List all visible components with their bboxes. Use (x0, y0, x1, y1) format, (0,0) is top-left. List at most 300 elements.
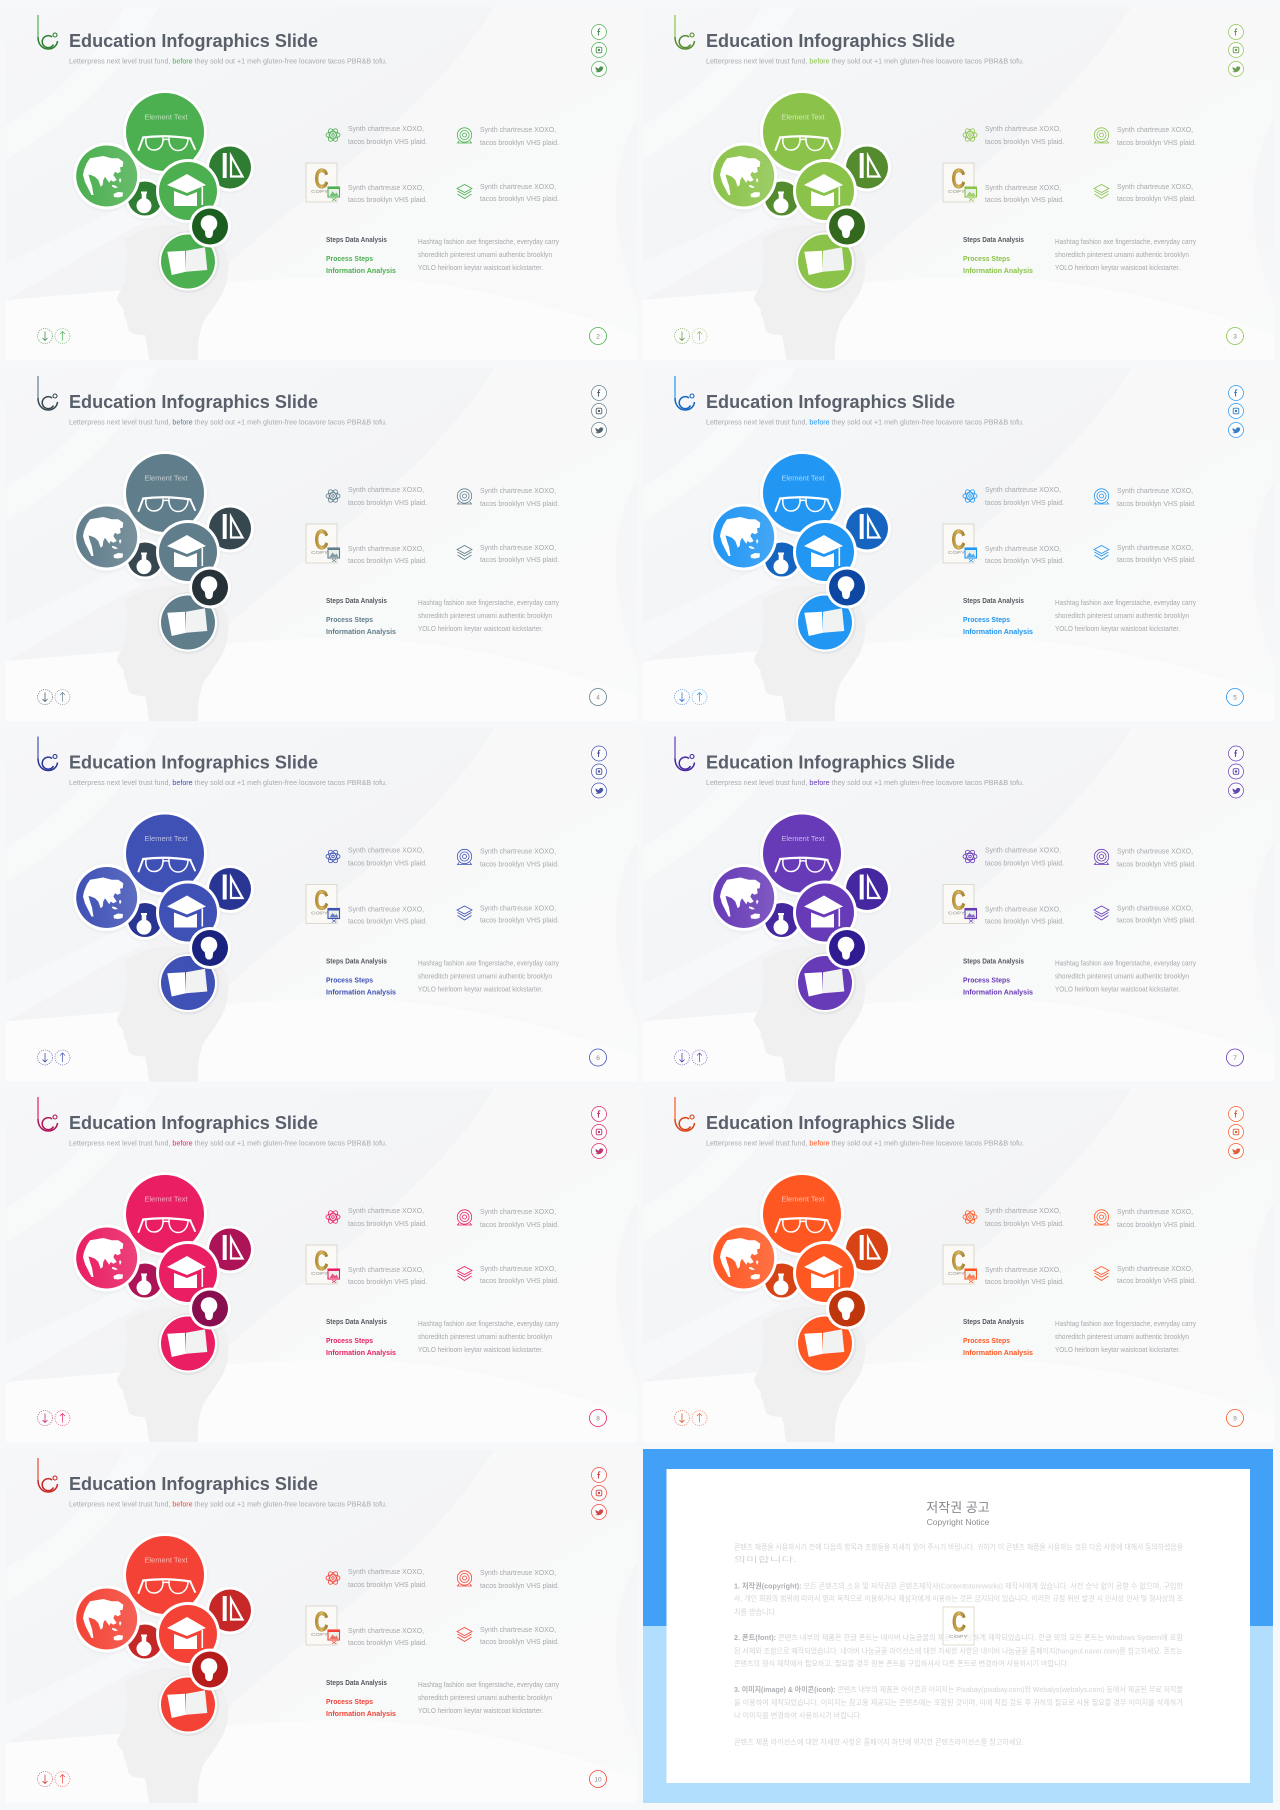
text: item 2: tacos brooklyn VHS plaid. (1117, 1220, 1196, 1229)
circle: glasses with label (760, 90, 844, 174)
circle: glasses with label: Element Text (144, 474, 189, 482)
text: item 4: tacos brooklyn VHS plaid. (480, 555, 559, 564)
navigation arrows (674, 1410, 707, 1426)
text: item 1 (348, 1567, 427, 1589)
text: item 4 (480, 904, 559, 924)
heading: steps data analysis: Steps Data Analysis (326, 1678, 387, 1687)
circle: triangle ruler (206, 1586, 254, 1634)
circle: light bulb (189, 206, 231, 248)
text: item 1: Synth chartreuse XOXO, (348, 846, 424, 854)
notice subtitle: Copyright Notice (927, 1517, 990, 1527)
title: Education Infographics Slide (69, 392, 318, 412)
page number (590, 328, 606, 344)
text: item 1: tacos brooklyn VHS plaid. (348, 1580, 427, 1589)
text: item 1 (348, 846, 427, 868)
paragraph: YOLO heirloom keytar waistcoat kickstarter. (418, 263, 543, 272)
navigation arrows (674, 1050, 707, 1065)
text: item 3: Synth chartreuse XOXO, (348, 904, 424, 914)
icon: layers (1094, 546, 1109, 560)
colored labels: Information Analysis (326, 627, 396, 636)
text: item 3: Synth chartreuse XOXO, (985, 183, 1061, 192)
circle: light bulb (189, 1648, 231, 1690)
copyright stamp: C (314, 163, 328, 194)
icon: atom (963, 488, 977, 504)
logo (675, 1097, 694, 1131)
text: item 3: tacos brooklyn VHS plaid. (985, 1277, 1064, 1286)
text: item 3: tacos brooklyn VHS plaid. (348, 1277, 427, 1286)
text: item 1: Synth chartreuse XOXO, (348, 485, 424, 494)
colored labels (963, 254, 1033, 275)
circle: book (158, 231, 220, 293)
text: item 1: tacos brooklyn VHS plaid. (985, 858, 1064, 868)
circle: graduation cap (156, 159, 220, 223)
circle: triangle ruler (206, 865, 254, 913)
text: item 3 (348, 904, 427, 926)
text: item 3: Synth chartreuse XOXO, (985, 1265, 1061, 1274)
white sheet (666, 1469, 1250, 1783)
logo (38, 15, 58, 49)
copyright stamp: COPY (311, 910, 328, 916)
text: item 2 (480, 125, 559, 147)
text: item 1: Synth chartreuse XOXO, (985, 124, 1061, 133)
text: item 3: tacos brooklyn VHS plaid. (348, 195, 427, 204)
circle: glasses with label (123, 90, 207, 174)
head silhouette (117, 1668, 229, 1803)
panel background (643, 368, 1274, 721)
circle: graduation cap (156, 1602, 220, 1666)
text: item 1: tacos brooklyn VHS plaid. (985, 137, 1064, 146)
subtitle: Letterpress next level trust fund, before they sold out +1 meh gluten-free locavore tacos PBR&B tofu. (69, 418, 387, 426)
paragraph (1055, 598, 1196, 633)
intro text: 콘텐츠 제품을 사용하시기 전에 다음의 항목과 조항들을 자세히 읽어 주시기 바랍니다. 귀하가 이 콘텐츠 제품을 사용하는 것은 다음 사항에 대해서 동의하셨음을 (734, 1542, 1183, 1552)
circle: flask (762, 900, 802, 940)
circle: book (794, 231, 856, 293)
paragraph (1055, 237, 1196, 272)
copyright stamp (943, 884, 976, 924)
section 2 text: 콘텐츠의 형식 제작에서 필요하고, 필요할 경우 원본 폰트를 구입하셔서 다른 폰트로 변경하여 사용하시기 바랍니다. (734, 1659, 1069, 1668)
text: item 4: Synth chartreuse XOXO, (480, 1264, 556, 1273)
paragraph: Hashtag fashion axe fingerstache, everyday carry (418, 1680, 559, 1689)
circle: globe (73, 1224, 140, 1292)
text: item 2: tacos brooklyn VHS plaid. (1117, 499, 1196, 508)
section 1 text: 사, 개인 회원의 범위에 따라서 영리 목적으로 이용하거나 제삼자에게 이용하는 것은 금지되어 있습니다. 이러한 규정 위반 발견 시 민사상 민사 및 형사상의 조 (734, 1594, 1183, 1603)
text: item 2: tacos brooklyn VHS plaid. (1117, 138, 1196, 147)
paragraph: shoreditch pinterest umami authentic brooklyn (418, 611, 552, 620)
heading: steps data analysis: Steps Data Analysis (963, 1317, 1024, 1326)
logo (675, 15, 694, 49)
paragraph (418, 237, 559, 272)
slide 1: green (6, 7, 637, 360)
colored labels: Information Analysis (963, 988, 1033, 996)
text: item 2 (480, 486, 559, 508)
heading: steps data analysis: Steps Data Analysis (326, 956, 387, 966)
text: item 4 (1117, 904, 1196, 924)
slide 9: red (6, 1450, 637, 1803)
text: item 4 (480, 543, 559, 564)
text: item 3: Synth chartreuse XOXO, (985, 904, 1061, 914)
navigation arrows (38, 690, 70, 704)
copyright stamp (943, 524, 976, 563)
circle: glasses with label: Element Text (781, 834, 826, 843)
text: item 4: Synth chartreuse XOXO, (480, 182, 556, 191)
text: item 3 (348, 544, 427, 565)
text: item 4: tacos brooklyn VHS plaid. (480, 1276, 559, 1285)
page number: 9 (1233, 1416, 1237, 1422)
text: item 4: Synth chartreuse XOXO, (1117, 1264, 1193, 1273)
circle: globe (73, 142, 140, 210)
circle: book (794, 592, 856, 654)
navigation arrows (38, 1772, 70, 1786)
circle: globe (710, 142, 777, 210)
icon: layers (457, 184, 472, 198)
circle: glasses with label (760, 812, 844, 896)
text: item 4: tacos brooklyn VHS plaid. (1117, 916, 1196, 924)
paragraph (1055, 958, 1196, 994)
text: item 2: tacos brooklyn VHS plaid. (480, 1220, 559, 1229)
text: item 1: Synth chartreuse XOXO, (348, 1206, 424, 1215)
heading: steps data analysis: Steps Data Analysis (963, 235, 1024, 244)
paragraph: Hashtag fashion axe fingerstache, everyday carry (418, 237, 559, 246)
blue frame top (643, 1449, 1273, 1626)
circle: glasses with label: Element Text (781, 112, 826, 122)
colored labels (963, 976, 1033, 996)
page number: 8 (596, 1416, 600, 1422)
text: item 2 (1117, 846, 1196, 868)
panel background (6, 1089, 637, 1442)
slide 4: blue (643, 368, 1274, 721)
text: item 4: tacos brooklyn VHS plaid. (480, 916, 559, 924)
colored labels: Information Analysis (963, 627, 1033, 636)
text: item 1: Synth chartreuse XOXO, (348, 1567, 424, 1576)
text: item 3 (985, 183, 1064, 204)
section 3 text: 을 이용하여 제작되었습니다. 이미지는 참고용 제공되는 콘텐츠에는 포함된 것이며, 이에 직접 검토 후 귀하의 필요로 사용 필요할 경우 이미지를 삭제하거 (734, 1698, 1183, 1707)
text: item 2: Synth chartreuse XOXO, (1117, 486, 1193, 495)
paragraph: shoreditch pinterest umami authentic brooklyn (418, 1693, 552, 1702)
paragraph: YOLO heirloom keytar waistcoat kickstarter. (1055, 1345, 1180, 1354)
colored labels: Process Steps (963, 1336, 1010, 1345)
circle: graduation cap (793, 880, 857, 944)
circle: globe (710, 864, 777, 931)
navigation arrows (674, 328, 707, 344)
copyright stamp (943, 1245, 976, 1284)
subtitle: Letterpress next level trust fund, before they sold out +1 meh gluten-free locavore tacos PBR&B tofu. (706, 1138, 1024, 1148)
icon: target (1094, 128, 1109, 143)
copyright stamp (306, 524, 340, 563)
page number (590, 688, 606, 706)
paragraph: shoreditch pinterest umami authentic brooklyn (1055, 611, 1189, 620)
text: item 2: tacos brooklyn VHS plaid. (1117, 860, 1196, 868)
icon: layers (457, 546, 472, 560)
circle: triangle ruler (843, 504, 891, 552)
social icons (592, 1468, 606, 1520)
colored labels: Process Steps (326, 615, 373, 624)
circle: book (794, 952, 856, 1014)
text: item 2: Synth chartreuse XOXO, (480, 125, 556, 134)
text: item 4 (480, 1625, 559, 1646)
heading: steps data analysis: Steps Data Analysis (326, 596, 387, 605)
colored labels: Process Steps (326, 976, 373, 984)
page number (1226, 1410, 1244, 1426)
copyright stamp: COPY (311, 550, 328, 555)
intro text: 의미합니다. (734, 1555, 797, 1564)
paragraph: YOLO heirloom keytar waistcoat kickstarter. (1055, 624, 1180, 633)
icon: atom (326, 849, 340, 864)
copyright stamp: C (314, 1606, 328, 1637)
panel background (643, 1089, 1274, 1442)
circle: triangle ruler (843, 1226, 891, 1274)
heading: steps data analysis: Steps Data Analysis (963, 956, 1024, 966)
panel background (6, 368, 637, 721)
text: item 4 (1117, 182, 1196, 203)
subtitle: Letterpress next level trust fund, before they sold out +1 meh gluten-free locavore tacos PBR&B tofu. (69, 1500, 387, 1508)
text: item 4: Synth chartreuse XOXO, (1117, 904, 1193, 912)
circle: light bulb (826, 206, 868, 248)
copyright stamp: C (952, 884, 966, 916)
text: item 2: Synth chartreuse XOXO, (480, 1568, 556, 1577)
social icons (1228, 746, 1244, 798)
circle: globe (73, 504, 140, 570)
text: item 2: Synth chartreuse XOXO, (1117, 1207, 1193, 1216)
section 3 text: 나 이미지를 변경하여 사용하시기 바랍니다. (734, 1711, 862, 1720)
text: item 4 (1117, 1264, 1196, 1285)
section 1 text: 1. 저작권(copyright): 모든 콘텐츠의 소유 및 저작권은 콘텐츠제작사(Contentstoreworks) 제작사에게 있습니다. 사전 승낙 없이 공할 수 없으며, 구입한 (734, 1582, 1183, 1590)
paragraph: shoreditch pinterest umami authentic brooklyn (1055, 1332, 1189, 1341)
text: item 3: tacos brooklyn VHS plaid. (348, 1638, 427, 1647)
title: Education Infographics Slide (69, 31, 318, 51)
colored labels: Information Analysis (963, 1348, 1033, 1357)
social icons (1228, 24, 1244, 76)
circle: glasses with label: Element Text (144, 834, 189, 843)
copyright stamp: C (314, 524, 328, 555)
panel: copyright notice (643, 1449, 1273, 1803)
text: item 2: tacos brooklyn VHS plaid. (480, 138, 559, 147)
text: item 2: Synth chartreuse XOXO, (480, 846, 556, 856)
icon: atom (326, 1209, 340, 1225)
text: item 1 (348, 124, 427, 146)
circle: glasses with label: Element Text (144, 1194, 189, 1204)
circle: triangle ruler (206, 144, 254, 192)
text: item 1 (348, 1206, 427, 1228)
icon: atom (963, 849, 977, 864)
text: item 3 (985, 904, 1064, 926)
page number (1226, 688, 1244, 706)
icon: atom (326, 1570, 340, 1586)
circle: light bulb (826, 566, 868, 608)
icon: atom (963, 1209, 977, 1225)
colored labels: Process Steps (326, 1336, 373, 1345)
text: item 2 (1117, 486, 1196, 508)
circle: book (158, 592, 220, 654)
colored labels (326, 1697, 396, 1718)
icon: layers (1094, 184, 1109, 198)
circle: glasses with label: Element Text (144, 1556, 189, 1564)
paragraph: Hashtag fashion axe fingerstache, everyday carry (1055, 598, 1196, 607)
circle: light bulb (189, 1288, 231, 1330)
paragraph: YOLO heirloom keytar waistcoat kickstarter. (1055, 263, 1180, 272)
paragraph: Hashtag fashion axe fingerstache, everyday carry (1055, 958, 1196, 968)
text: item 4: tacos brooklyn VHS plaid. (1117, 1276, 1196, 1285)
icon: target (457, 1571, 472, 1586)
text: item 3 (985, 544, 1064, 565)
heading: steps data analysis: Steps Data Analysis (963, 596, 1024, 605)
circle: flask (762, 540, 802, 580)
icon: atom (963, 127, 977, 143)
text: item 2: tacos brooklyn VHS plaid. (480, 860, 559, 868)
paragraph: Hashtag fashion axe fingerstache, everyday carry (418, 598, 559, 607)
slide 8: deep orange (643, 1089, 1274, 1442)
paragraph (418, 1680, 559, 1715)
colored labels (963, 1336, 1033, 1357)
copyright stamp: C (314, 1245, 328, 1276)
panel background (6, 1450, 637, 1803)
circle: globe (73, 864, 140, 931)
text: item 3: tacos brooklyn VHS plaid. (348, 556, 427, 565)
heading: steps data analysis: Steps Data Analysis (326, 235, 387, 244)
social icons (592, 746, 606, 798)
head silhouette (754, 946, 866, 1082)
circle: graduation cap (156, 520, 220, 584)
circle: glasses with label: Element Text (781, 1194, 826, 1204)
text: item 3: Synth chartreuse XOXO, (348, 1626, 424, 1635)
logo (38, 736, 58, 770)
text: item 4: Synth chartreuse XOXO, (1117, 543, 1193, 552)
notice title: 저작권 공고 (926, 1500, 990, 1515)
title: Education Infographics Slide (706, 752, 955, 772)
text: item 2: tacos brooklyn VHS plaid. (480, 499, 559, 508)
intro text (734, 1542, 1183, 1564)
social icons (592, 24, 606, 76)
page number: 4 (596, 694, 600, 702)
text: item 3: tacos brooklyn VHS plaid. (348, 916, 427, 926)
circle: graduation cap (156, 880, 220, 944)
section 3 text: 3. 이미지(image) & 아이콘(icon): 콘텐츠 내부의 제품은 아이콘과 이미지는 Pixabay(pixabay.com)와 Webalys(webalys.com) 등에서 제공된 무료 저작물 (734, 1685, 1183, 1694)
circle: globe (710, 504, 777, 570)
icon: target (457, 1210, 472, 1225)
text: item 1: tacos brooklyn VHS plaid. (985, 498, 1064, 507)
paragraph: YOLO heirloom keytar waistcoat kickstarter. (418, 1345, 543, 1354)
text: item 1: tacos brooklyn VHS plaid. (348, 1219, 427, 1228)
text: item 4: tacos brooklyn VHS plaid. (480, 194, 559, 203)
head silhouette (754, 586, 866, 721)
navigation arrows (674, 690, 707, 704)
circle: globe (710, 1224, 777, 1292)
icon: layers (457, 1266, 472, 1280)
copyright stamp: C (952, 163, 966, 194)
text: item 4 (1117, 543, 1196, 564)
subtitle: Letterpress next level trust fund, before they sold out +1 meh gluten-free locavore tacos PBR&B tofu. (706, 778, 1024, 787)
colored labels: Information Analysis (326, 1709, 396, 1718)
paragraph (418, 1319, 559, 1354)
text: item 1: tacos brooklyn VHS plaid. (348, 858, 427, 868)
text: item 2 (480, 1207, 559, 1229)
closing text: 콘텐츠 제품 라이선스에 대한 자세한 사항은 홈페이지 하단에 위치한 콘텐츠라이선스를 참고하세요. (734, 1738, 1024, 1746)
icon: layers (1094, 906, 1109, 920)
text: item 1: tacos brooklyn VHS plaid. (348, 498, 427, 507)
colored labels: Process Steps (326, 1697, 373, 1706)
section 3 text (734, 1685, 1183, 1720)
panel background (6, 728, 637, 1082)
subtitle: Letterpress next level trust fund, before they sold out +1 meh gluten-free locavore tacos PBR&B tofu. (706, 56, 1024, 66)
circle: flask (762, 178, 802, 218)
text: item 4: Synth chartreuse XOXO, (480, 1625, 556, 1634)
copyright stamp: COPY (948, 550, 965, 555)
text: item 3 (985, 1265, 1064, 1286)
icon: target (457, 128, 472, 143)
page number: 5 (1233, 694, 1237, 702)
copyright stamp: C (952, 1245, 966, 1276)
paragraph: Hashtag fashion axe fingerstache, everyday carry (1055, 237, 1196, 246)
copyright stamp: COPY (949, 1634, 968, 1639)
circle: glasses with label: Element Text (781, 474, 826, 482)
paragraph: shoreditch pinterest umami authentic brooklyn (418, 972, 552, 980)
colored labels: Information Analysis (326, 266, 396, 275)
section 1 text (734, 1582, 1183, 1616)
circle: glasses with label (123, 1533, 207, 1617)
circle: glasses with label (123, 812, 207, 896)
icon: target (1094, 489, 1109, 504)
copyright stamp (306, 163, 340, 202)
paragraph: YOLO heirloom keytar waistcoat kickstarter. (418, 1706, 543, 1715)
title: Education Infographics Slide (69, 1474, 318, 1494)
text: item 1 (985, 1206, 1064, 1228)
slide 2: light green (643, 7, 1274, 360)
navigation arrows (38, 1050, 70, 1065)
colored labels (963, 615, 1033, 636)
text: item 2 (1117, 1207, 1196, 1229)
title: Education Infographics Slide (706, 31, 955, 51)
icon: target (1094, 849, 1109, 864)
circle: triangle ruler (206, 1226, 254, 1274)
circle: graduation cap (793, 520, 857, 584)
subtitle: Letterpress next level trust fund, before they sold out +1 meh gluten-free locavore tacos PBR&B tofu. (69, 1138, 387, 1148)
circle: graduation cap (793, 159, 857, 223)
text: item 3: tacos brooklyn VHS plaid. (985, 195, 1064, 204)
circle: flask (125, 1622, 165, 1662)
copyright stamp (306, 1606, 340, 1645)
paragraph (418, 598, 559, 633)
title: Education Infographics Slide (69, 752, 318, 772)
text: item 1 (985, 124, 1064, 146)
subtitle: Letterpress next level trust fund, before they sold out +1 meh gluten-free locavore tacos PBR&B tofu. (69, 778, 387, 787)
colored labels: Process Steps (963, 976, 1010, 984)
title: Education Infographics Slide (706, 1113, 955, 1133)
paragraph: YOLO heirloom keytar waistcoat kickstarter. (418, 624, 543, 633)
page number (590, 1410, 606, 1426)
copyright stamp (943, 163, 976, 202)
copyright stamp: COPY (948, 1271, 965, 1276)
circle: light bulb (826, 927, 868, 969)
copyright stamp: C (952, 1606, 966, 1637)
text: item 3: Synth chartreuse XOXO, (348, 183, 424, 192)
colored labels: Process Steps (963, 254, 1010, 263)
section 2 text: 된 서체와 조합으로 제작되었습니다. 네이버 나눔글꼴 라이선스에 대한 자세한 사항은 네이버 나눔글꼴 홈페이지(hangeul.naver.com)를 참고하세요. 폰트는 (734, 1646, 1183, 1656)
page number (590, 1770, 606, 1788)
colored labels: Process Steps (963, 615, 1010, 624)
social icons (1228, 386, 1244, 438)
text: item 3: Synth chartreuse XOXO, (348, 1265, 424, 1274)
circle: book (158, 1313, 220, 1375)
colored labels: Information Analysis (963, 266, 1033, 275)
panel background (643, 728, 1274, 1082)
circle: glasses with label (123, 451, 207, 535)
title: Education Infographics Slide (706, 392, 955, 412)
text: item 1: Synth chartreuse XOXO, (985, 485, 1061, 494)
text: item 2 (480, 1568, 559, 1590)
text: item 4: tacos brooklyn VHS plaid. (480, 1637, 559, 1646)
logo (38, 1097, 58, 1131)
text: item 2: Synth chartreuse XOXO, (480, 486, 556, 495)
text: item 1: Synth chartreuse XOXO, (348, 124, 424, 133)
